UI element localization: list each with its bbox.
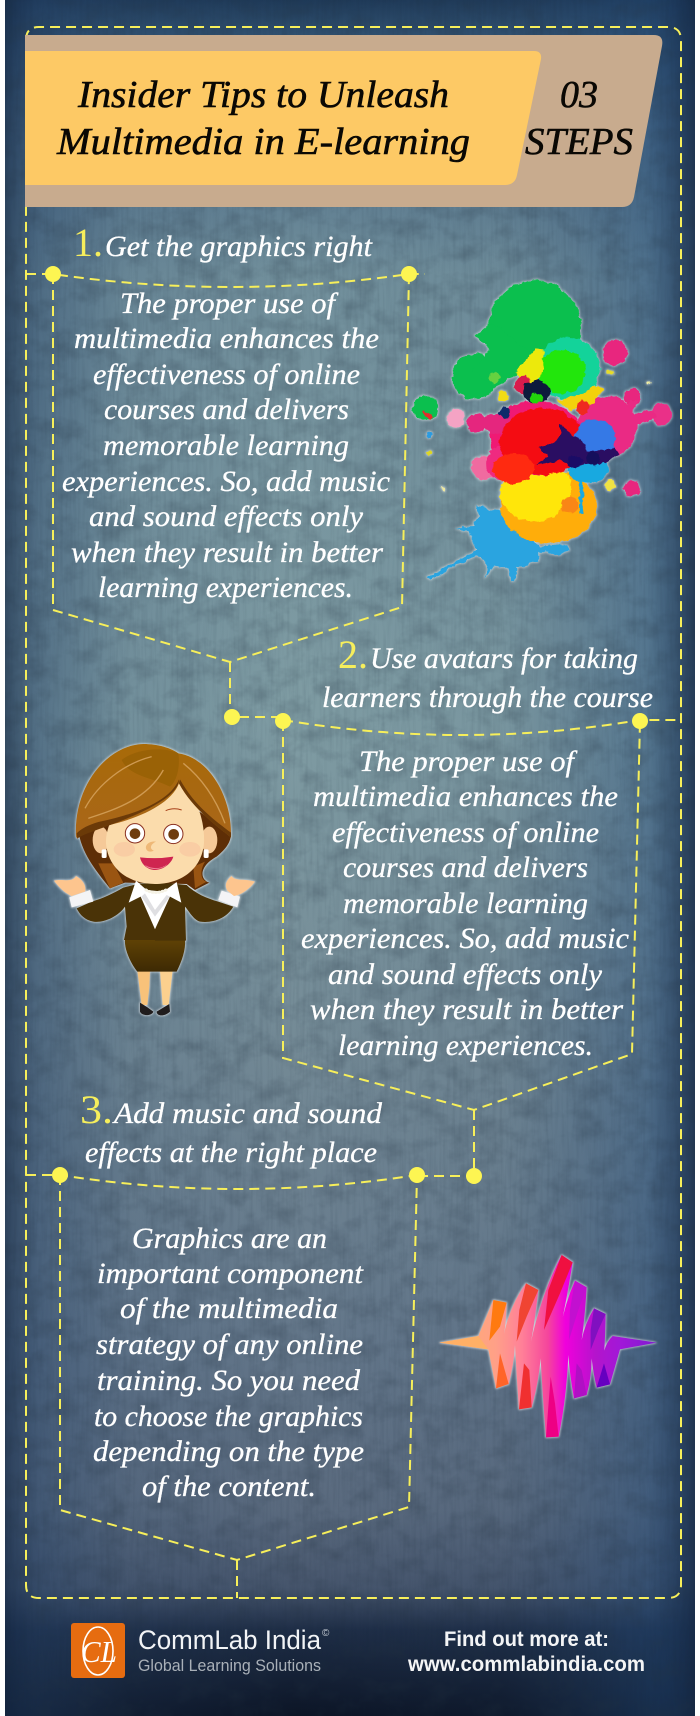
- icon: paint splatter: [412, 281, 672, 582]
- step 3 body text: Graphics are an: [132, 1222, 327, 1255]
- step 2 body text: [301, 745, 629, 1062]
- title text: Insider Tips to Unleash: [77, 74, 449, 116]
- steps count: 03: [560, 74, 598, 116]
- legs: [137, 970, 150, 1005]
- back hair: [79, 787, 231, 890]
- step 1 heading: Get the graphics right: [105, 230, 373, 263]
- step 1 body text: memorable learning: [103, 429, 349, 462]
- step 3 body text: of the content.: [142, 1470, 316, 1503]
- face: [106, 777, 204, 884]
- eyes: [125, 824, 145, 843]
- small droplets: [426, 449, 432, 455]
- shoes: [140, 1003, 170, 1015]
- step 3 body text: to choose the graphics: [94, 1400, 363, 1433]
- steps count: STEPS: [525, 121, 633, 163]
- title banner: [25, 35, 662, 207]
- step 3 body text: training. So you need: [97, 1364, 361, 1397]
- step 3 heading: 3.: [80, 1087, 113, 1132]
- step 2 body text: multimedia enhances the: [313, 780, 618, 813]
- footer: CommLab India logo: CL: [81, 1634, 117, 1669]
- tagline: Global Learning Solutions: [138, 1657, 321, 1675]
- eyebrow: [166, 809, 182, 811]
- step 2 body text: memorable learning: [343, 887, 588, 920]
- ears: [93, 827, 109, 853]
- step 2 body text: The proper use of: [359, 745, 578, 778]
- step 2 heading: [322, 632, 653, 714]
- footer: website call to action: [407, 1628, 645, 1676]
- icon: cartoon avatar woman: [54, 744, 255, 1015]
- wave silhouette: [439, 1255, 657, 1437]
- step 1 body text: experiences. So, add music: [62, 465, 390, 498]
- step 3 heading: effects at the right place: [85, 1136, 377, 1169]
- step 2 heading: Use avatars for taking: [370, 642, 638, 675]
- step 1 body text: The proper use of: [120, 287, 339, 320]
- step 3 heading: Add music and sound: [112, 1097, 383, 1130]
- blouse: [129, 881, 181, 929]
- sky blue splash: [568, 457, 609, 483]
- step 1 body text: and sound effects only: [89, 500, 364, 533]
- step 2 dashed frame: [224, 709, 681, 1176]
- skirt: [125, 939, 185, 972]
- green splash: [489, 281, 581, 373]
- steps count: [525, 74, 633, 163]
- step 3 heading: [80, 1087, 383, 1169]
- step 1 heading: 1.: [73, 220, 103, 265]
- footer: website call to action: www.commlabindia.com: [407, 1653, 645, 1676]
- step 2 body text: when they result in better: [310, 993, 623, 1026]
- top hair: [76, 744, 231, 839]
- step 2 body text: and sound effects only: [328, 958, 603, 991]
- footer: website call to action: Find out more at:: [444, 1628, 609, 1651]
- step 1 body text: courses and delivers: [104, 393, 349, 426]
- step 1 body text: [62, 287, 390, 604]
- mouth: [140, 857, 173, 870]
- teal and lime splash: [536, 338, 600, 399]
- step 1 body text: learning experiences.: [98, 571, 353, 604]
- step 1 body text: multimedia enhances the: [74, 322, 379, 355]
- nose: [146, 842, 156, 852]
- step 2 heading: learners through the course: [322, 681, 653, 714]
- step 2 body text: learning experiences.: [338, 1029, 593, 1062]
- jacket and arms: [77, 883, 233, 941]
- step 3 body text: important component: [97, 1257, 364, 1290]
- step 3 body text: [93, 1222, 364, 1503]
- title banner: Multimedia in E-learning: [56, 121, 470, 163]
- ribbon highlights: [489, 1300, 507, 1341]
- pink blobs upper right: [602, 340, 628, 365]
- step 2 heading: 2.: [338, 632, 368, 677]
- icon: colorful sound wave: [439, 1255, 657, 1437]
- necklace: [146, 890, 166, 892]
- orange title panel: [25, 51, 541, 185]
- step 3 body text: strategy of any online: [96, 1328, 363, 1361]
- cuffs: [69, 890, 240, 907]
- hands: [54, 876, 255, 896]
- step 3 dashed frame: [26, 1167, 482, 1598]
- earrings: [102, 849, 107, 858]
- footer: CommLab India logo: ©: [322, 1628, 330, 1639]
- step 1 heading: [73, 220, 373, 265]
- blue and purple splash: [574, 419, 616, 461]
- step 1 body text: effectiveness of online: [93, 358, 360, 391]
- orange and yellow splash: [500, 470, 597, 543]
- logo mark: [71, 1623, 125, 1678]
- step 2 body text: courses and delivers: [343, 851, 588, 884]
- step 2 body text: experiences. So, add music: [301, 922, 629, 955]
- blue lower splash: [427, 505, 570, 582]
- company name: CommLab India: [138, 1625, 322, 1655]
- step 3 body text: of the multimedia: [120, 1292, 338, 1325]
- footer: CommLab India logo: [71, 1623, 330, 1678]
- step 1 body text: when they result in better: [71, 536, 383, 569]
- dark centre: [515, 376, 532, 394]
- step 2 body text: effectiveness of online: [332, 816, 599, 849]
- tan steps band: [25, 35, 662, 207]
- step 1 dashed frame: [26, 266, 425, 717]
- pink and red splash: [490, 401, 583, 476]
- cheeks: [114, 842, 135, 857]
- step 3 body text: depending on the type: [93, 1435, 364, 1468]
